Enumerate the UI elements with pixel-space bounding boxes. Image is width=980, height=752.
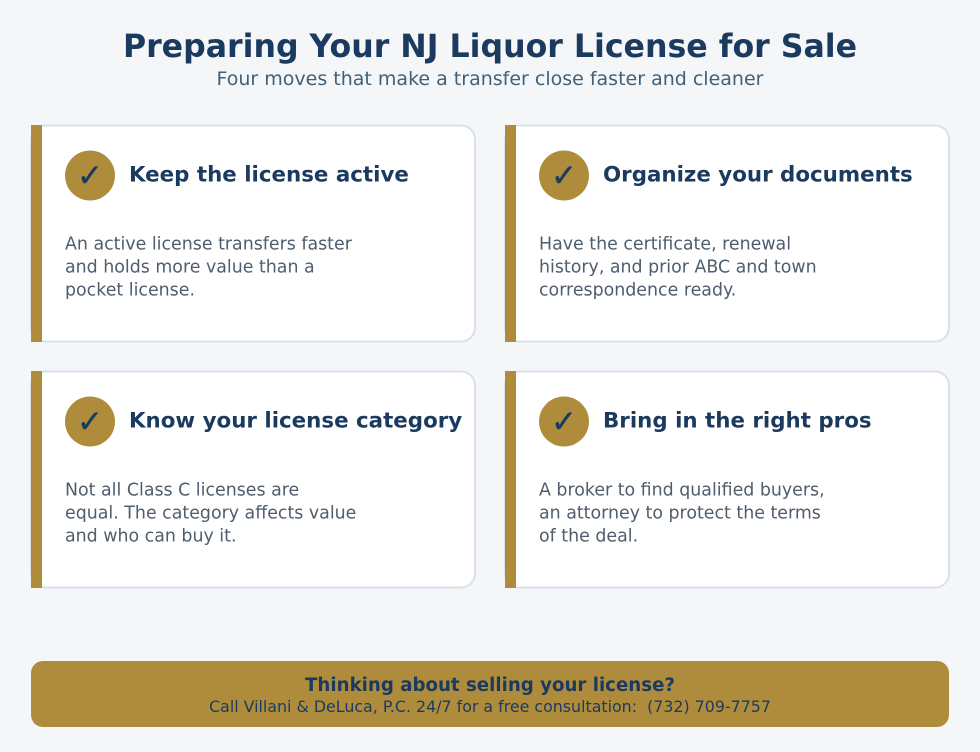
body text: A broker to find qualified buyers, bbox=[539, 480, 825, 500]
icon: check badge bbox=[539, 150, 589, 200]
heading: Bring in the right pros bbox=[603, 408, 872, 434]
icon: check badge: ✓ bbox=[77, 158, 103, 194]
banner heading: Thinking about selling your license? bbox=[305, 675, 675, 696]
accent bar bbox=[505, 125, 516, 342]
icon: check badge: ✓ bbox=[551, 404, 577, 440]
subtitle: Four moves that make a transfer close faster and cleaner bbox=[217, 68, 764, 90]
call to action banner bbox=[31, 661, 949, 727]
body text: and who can buy it. bbox=[65, 526, 236, 546]
icon: check badge bbox=[539, 396, 589, 446]
icon: check badge bbox=[65, 396, 115, 446]
body text: history, and prior ABC and town bbox=[539, 258, 817, 278]
body text: Not all Class C licenses are bbox=[65, 480, 299, 500]
body text: of the deal. bbox=[539, 526, 638, 546]
body text: pocket license. bbox=[65, 280, 195, 300]
banner contact line: Call Villani & DeLuca, P.C. 24/7 for a free consultation: (732) 709-7757 bbox=[209, 697, 771, 716]
heading: Know your license category bbox=[129, 408, 462, 434]
accent bar bbox=[31, 125, 42, 342]
icon: check badge bbox=[65, 150, 115, 200]
title: Preparing Your NJ Liquor License for Sale bbox=[123, 29, 857, 65]
body text: and holds more value than a bbox=[65, 258, 315, 278]
accent bar bbox=[31, 371, 42, 588]
body text: an attorney to protect the terms bbox=[539, 504, 821, 524]
icon: check badge: ✓ bbox=[77, 404, 103, 440]
panel: bring in the right pros bbox=[505, 371, 949, 588]
body text: An active license transfers faster bbox=[65, 234, 353, 254]
panel: know your license category bbox=[31, 371, 475, 588]
body text: correspondence ready. bbox=[539, 280, 736, 300]
body text: equal. The category affects value bbox=[65, 504, 356, 524]
panel: keep the license active bbox=[31, 125, 475, 342]
heading: Keep the license active bbox=[129, 162, 409, 188]
heading: Organize your documents bbox=[603, 162, 913, 188]
icon: check badge: ✓ bbox=[551, 158, 577, 194]
body text: Have the certificate, renewal bbox=[539, 234, 791, 254]
panel: organize your documents bbox=[505, 125, 949, 342]
accent bar bbox=[505, 371, 516, 588]
